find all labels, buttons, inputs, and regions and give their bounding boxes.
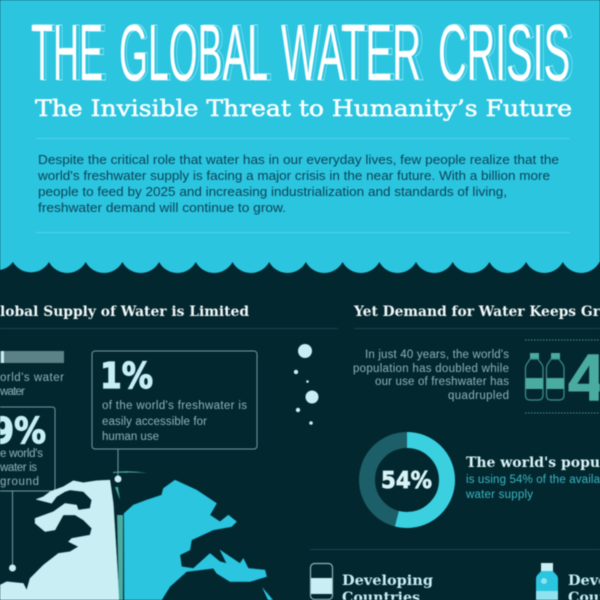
- intro paragraph: world's freshwater supply is facing a major crisis in the near future. With a billion more: [37, 169, 550, 183]
- callout: 9% groundwater: ground: [0, 476, 39, 488]
- text: world's population: water supply: [465, 489, 533, 501]
- text: world's water: [0, 372, 64, 398]
- text: world's population: [465, 455, 600, 501]
- heading: global supply: lobal Supply of Water is Limited: [0, 304, 249, 320]
- text: population doubled: quadrupled: [448, 390, 509, 402]
- donut chart: 54%: 54%: [381, 468, 432, 494]
- text: population doubled: population has doubled while: [353, 363, 509, 375]
- label: developed countries: [568, 573, 600, 600]
- text: population doubled: our use of freshwater has: [375, 376, 509, 388]
- title: THE: [31, 8, 103, 97]
- header wave band: [0, 0, 600, 273]
- icon: bottles: [526, 353, 564, 400]
- land: north america (pale): [0, 480, 119, 600]
- icon: developed countries bottle: [536, 563, 558, 600]
- accessible water sliver: [117, 515, 123, 600]
- heading: demand: Yet Demand for Water Keeps Gr: [353, 304, 600, 320]
- callout: 1% accessible: easily accessible for: [102, 416, 207, 428]
- intro paragraph: Despite the critical role that water has in our everyday lives, few people realize that the: [38, 153, 559, 167]
- text: world's population: is using 54% of the availa: [466, 474, 600, 486]
- callout: 1% accessible: human use: [102, 431, 159, 443]
- title: WATER: [283, 8, 425, 97]
- title: WATER: [281, 8, 421, 97]
- text: world's water: water: [0, 386, 25, 398]
- icon: developing countries bottle: [310, 564, 332, 600]
- text: population doubled: [353, 349, 509, 402]
- text: population doubled: In just 40 years, the world's: [365, 349, 509, 361]
- bar: share of freshwater: [0, 351, 64, 363]
- water droplets: [294, 344, 318, 425]
- text: world's population: The world's popu: [466, 455, 600, 471]
- connector: accessible water: [114, 449, 122, 482]
- callout: 1% accessible: 1%: [100, 356, 153, 397]
- intro paragraph: people to feed by 2025 and increasing industrialization and standards of living,: [38, 185, 507, 199]
- callout: 1% accessible: of the world's freshwater is: [102, 400, 247, 412]
- intro paragraph: freshwater demand will continue to grow.: [38, 201, 286, 215]
- intro paragraph: [37, 153, 559, 215]
- dotted rules: [525, 340, 600, 413]
- label: developing countries: [342, 573, 433, 600]
- donut chart: 54%: [367, 440, 447, 520]
- title: [31, 8, 574, 97]
- text: world's water: orld's water: [0, 372, 64, 384]
- connector: groundwater: [9, 491, 16, 572]
- title: GLOBAL: [121, 8, 272, 97]
- callout: 9% groundwater: water is: [0, 462, 37, 474]
- title: THE: [33, 8, 107, 97]
- subtitle: The Invisible Threat to Humanity’s Future: [35, 97, 572, 122]
- title: GLOBAL: [119, 8, 268, 97]
- callout: 1% accessible: [92, 351, 257, 449]
- land: europe (blue): [124, 480, 267, 600]
- land: africa edge: [262, 587, 273, 600]
- callout: 9% groundwater: [0, 407, 55, 491]
- label: developing countries: Developing: [342, 573, 433, 589]
- globe illustration: [0, 471, 273, 600]
- callout: 9% groundwater: e world's: [0, 448, 43, 460]
